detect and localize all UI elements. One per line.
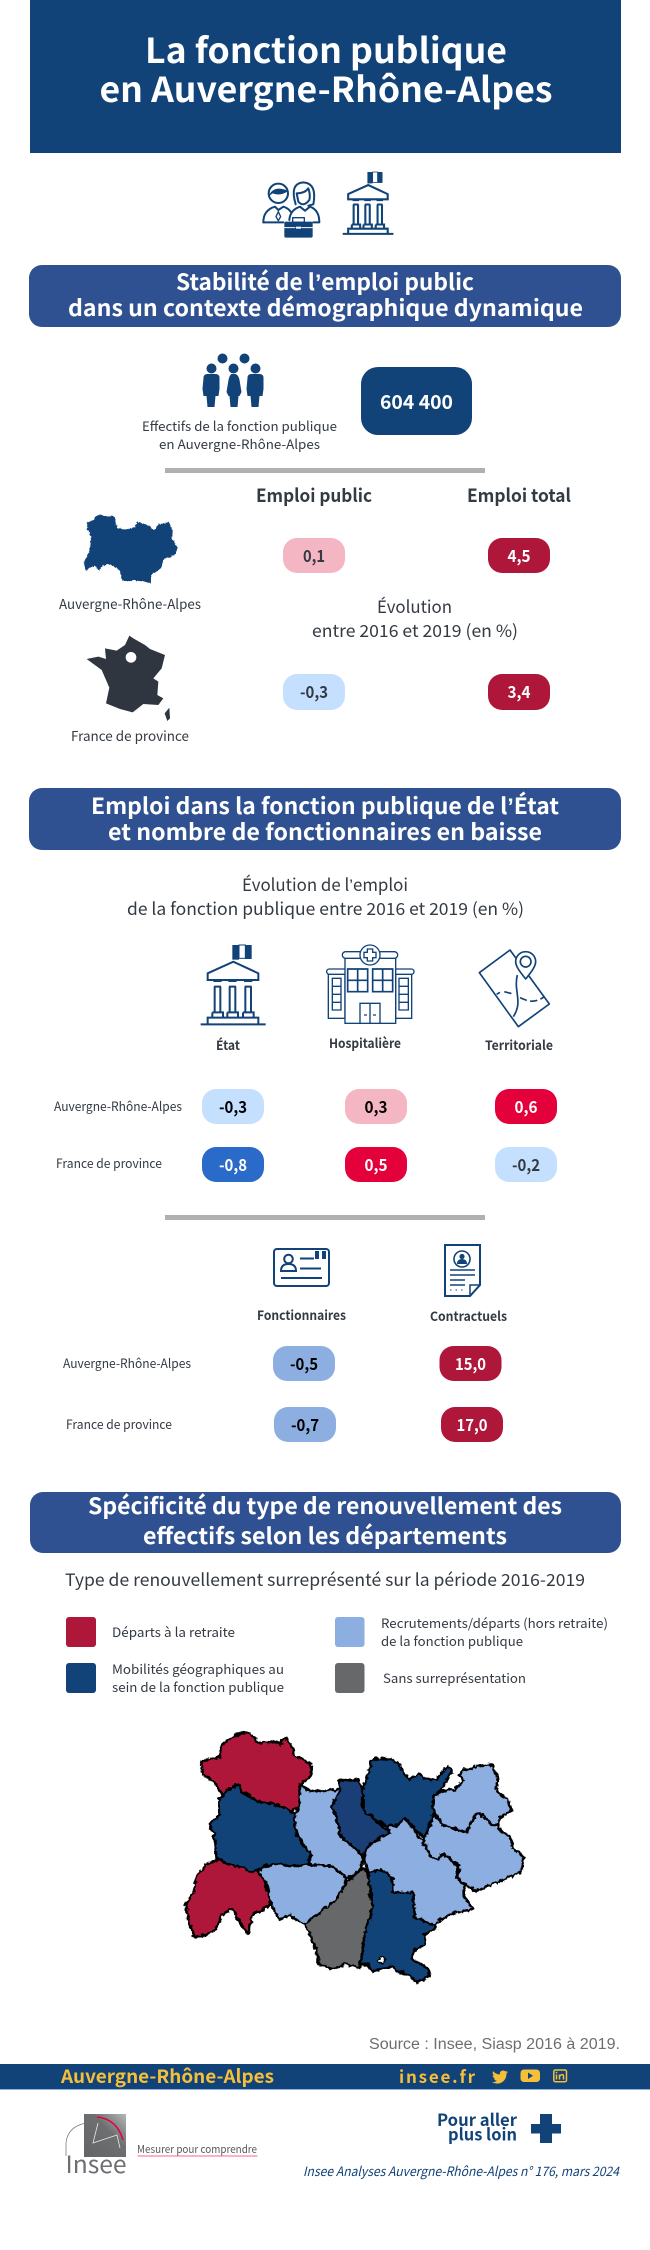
value pill: province contractuels: [441, 1407, 503, 1442]
department: Rhône: [330, 1778, 388, 1855]
column heading: emploi total: Emploi total: [467, 482, 571, 508]
icon: state building: [343, 172, 393, 234]
section heading: stabilité de l'emploi public: [29, 265, 621, 327]
caption: type de renouvellement: Type de renouvellement surreprésenté sur la période 2016-2019: [65, 1566, 585, 1591]
value pill: province fonctionnaires: -0,7: [291, 1412, 319, 1436]
link: pour aller plus loin: [437, 2107, 561, 2146]
title banner: [30, 0, 621, 153]
value pill: ARA territoriale: 0,6: [514, 1094, 538, 1118]
value pill: ARA hospitalière: [345, 1089, 407, 1124]
row label: Auvergne-Rhône-Alpes: Auvergne-Rhône-Alpes: [63, 1353, 191, 1372]
section heading: emploi fonction publique de l'Etat: et nombre de fonctionnaires en baisse: [108, 815, 542, 847]
icon: plus sign: [531, 2114, 561, 2143]
legend item: recrutements: Recrutements/départs (hors retraite): [381, 1613, 608, 1632]
value pill: province emploi public: [283, 674, 345, 710]
column label: Hospitalière: Hospitalière: [329, 1033, 401, 1052]
legend item: recrutements: [335, 1613, 608, 1650]
value pill: province contractuels: 17,0: [456, 1412, 488, 1436]
row label: France de province: France de province: [66, 1414, 172, 1433]
Insee logo: [66, 2114, 258, 2180]
section heading: renouvellement des effectifs: effectifs selon les départements: [143, 1519, 507, 1551]
legend item: départs à la retraite: [66, 1617, 235, 1647]
section heading: emploi fonction publique de l'Etat: Emploi dans la fonction publique de l ’État: [91, 789, 560, 821]
source note: Source : Insee, Siasp 2016 à 2019.: [369, 2036, 620, 2053]
value pill: ARA État: -0,3: [219, 1094, 247, 1118]
footer band: [0, 2063, 650, 2090]
department: Ain: [362, 1757, 452, 1837]
department: Drôme: [358, 1868, 435, 1982]
value pill: ARA fonctionnaires: [273, 1346, 335, 1381]
icon: ID card: [274, 1249, 329, 1286]
value pill: province État: -0,8: [219, 1152, 247, 1176]
department: Ardèche: [305, 1867, 372, 1968]
icon: twitter: [492, 2071, 508, 2084]
legend item: départs à la retraite: Départs à la retraite: [112, 1622, 235, 1641]
caption: effectifs: en Auvergne-Rhône-Alpes: [159, 434, 320, 453]
value pill: ARA hospitalière: 0,3: [364, 1094, 388, 1118]
legend item: sans surreprésentation: [335, 1663, 526, 1693]
icon: state building: [201, 945, 266, 1024]
caption: évolution: entre 2016 et 2019 (en %): [312, 617, 518, 642]
value pill: province emploi total: 3,4: [508, 679, 531, 703]
value pill: province hospitalière: 0,5: [364, 1152, 388, 1176]
caption: évolution: [312, 593, 518, 642]
section heading: renouvellement des effectifs: Spécificité du type de renouvellement des: [88, 1489, 562, 1521]
legend item: mobilités géographiques: Mobilités géographiques au: [112, 1659, 284, 1678]
value pill: ARA emploi public: [283, 538, 345, 573]
row label: Auvergne-Rhône-Alpes: Auvergne-Rhône-Alpes: [54, 1096, 182, 1115]
title banner: La fonction publique: [145, 23, 507, 73]
icon: hospital: [327, 945, 414, 1023]
caption: évolution: Évolution: [377, 593, 452, 618]
row label: France de province: France de province: [56, 1153, 162, 1172]
section heading: stabilité de l'emploi public: Stabilité de l’emploi public: [176, 265, 474, 297]
value pill: province territoriale: -0,2: [512, 1152, 540, 1176]
legend item: mobilités géographiques: [66, 1659, 284, 1696]
icon: civil servants with briefcase: [263, 182, 319, 238]
department: Isère: [363, 1817, 472, 1924]
column label: État: État: [216, 1035, 240, 1054]
value pill: province hospitalière: [345, 1147, 407, 1182]
value pill: ARA territoriale: [495, 1089, 557, 1124]
department: Haute-Savoie: [432, 1764, 511, 1831]
value pill: province fonctionnaires: [274, 1407, 336, 1442]
department: Savoie: [422, 1812, 523, 1890]
column label: Fonctionnaires: Fonctionnaires: [257, 1305, 346, 1324]
value pill: ARA emploi total: [488, 538, 550, 573]
department: Allier: [200, 1732, 310, 1810]
value pill: ARA emploi public: 0,1: [303, 543, 325, 567]
map: France silhouette: [87, 636, 170, 721]
value box: 604 400: [361, 367, 472, 435]
section heading: renouvellement des effectifs: [30, 1489, 621, 1553]
column heading: emploi public: Emploi public: [256, 482, 372, 508]
value pill: province emploi public: -0,3: [300, 679, 328, 703]
column label: Territoriale: Territoriale: [485, 1035, 553, 1054]
footer region name: Auvergne-Rhône-Alpes: [60, 2063, 274, 2089]
label: Auvergne-Rhône-Alpes: Auvergne-Rhône-Alpes: [59, 593, 201, 613]
map: Auvergne-Rhône-Alpes silhouette: [83, 513, 177, 583]
Insee logo: Insee: [66, 2145, 126, 2180]
value pill: ARA fonctionnaires: -0,5: [290, 1351, 318, 1375]
caption: évolution de l'emploi: Évolution de l’emploi: [242, 871, 408, 896]
icon: territory map with pin: [479, 950, 549, 1027]
legend item: mobilités géographiques: sein de la fonction publique: [112, 1677, 284, 1696]
department: Puy-de-Dôme: [208, 1784, 310, 1872]
department: Haute-Loire: [257, 1862, 345, 1924]
value pill: ARA État: [202, 1089, 264, 1124]
value box: 604 400: 604 400: [380, 386, 453, 415]
footer website: insee.fr: [399, 2063, 476, 2088]
department: Cantal: [185, 1858, 270, 1937]
value pill: province emploi total: [488, 674, 550, 710]
section heading: stabilité de l'emploi public: dans un contexte démographique dynamique: [68, 291, 583, 323]
legend item: recrutements: de la fonction publique: [381, 1631, 523, 1650]
legend item: sans surreprésentation: Sans surreprésentation: [383, 1668, 526, 1687]
publication reference: Insee Analyses Auvergne-Rhône-Alpes n° 176, mars 2024: [303, 2161, 620, 2180]
caption: effectifs: Effectifs de la fonction publique: [142, 416, 337, 435]
icon: contract document: [445, 1245, 480, 1296]
value pill: ARA contractuels: [440, 1346, 502, 1381]
caption: effectifs: [142, 416, 337, 453]
link: pour aller plus loin: plus loin: [448, 2122, 517, 2146]
link: pour aller plus loin: Pour aller: [437, 2107, 518, 2131]
icon: youtube: [520, 2070, 540, 2082]
caption: évolution de l'emploi: de la fonction publique entre 2016 et 2019 (en %): [127, 895, 524, 920]
enclave: [375, 1955, 385, 1963]
value pill: province territoriale: [495, 1147, 557, 1182]
department: Loire: [293, 1783, 362, 1877]
caption: évolution de l'emploi: [127, 871, 524, 920]
column label: Contractuels: Contractuels: [430, 1306, 507, 1325]
value pill: province État: [202, 1147, 264, 1182]
value pill: ARA contractuels: 15,0: [455, 1351, 486, 1375]
icon: group of people: [202, 354, 264, 407]
logo tagline: Mesurer pour comprendre: [137, 2141, 257, 2157]
map: departments of Auvergne-Rhône-Alpes: [185, 1732, 523, 1982]
section heading: emploi fonction publique de l'Etat: [29, 788, 621, 850]
title banner: en Auvergne-Rhône-Alpes: [100, 62, 552, 112]
label: France de province: France de province: [71, 725, 189, 745]
legend: [66, 1613, 608, 1696]
value pill: ARA emploi total: 4,5: [508, 543, 530, 567]
icon: linkedin: [554, 2070, 566, 2082]
